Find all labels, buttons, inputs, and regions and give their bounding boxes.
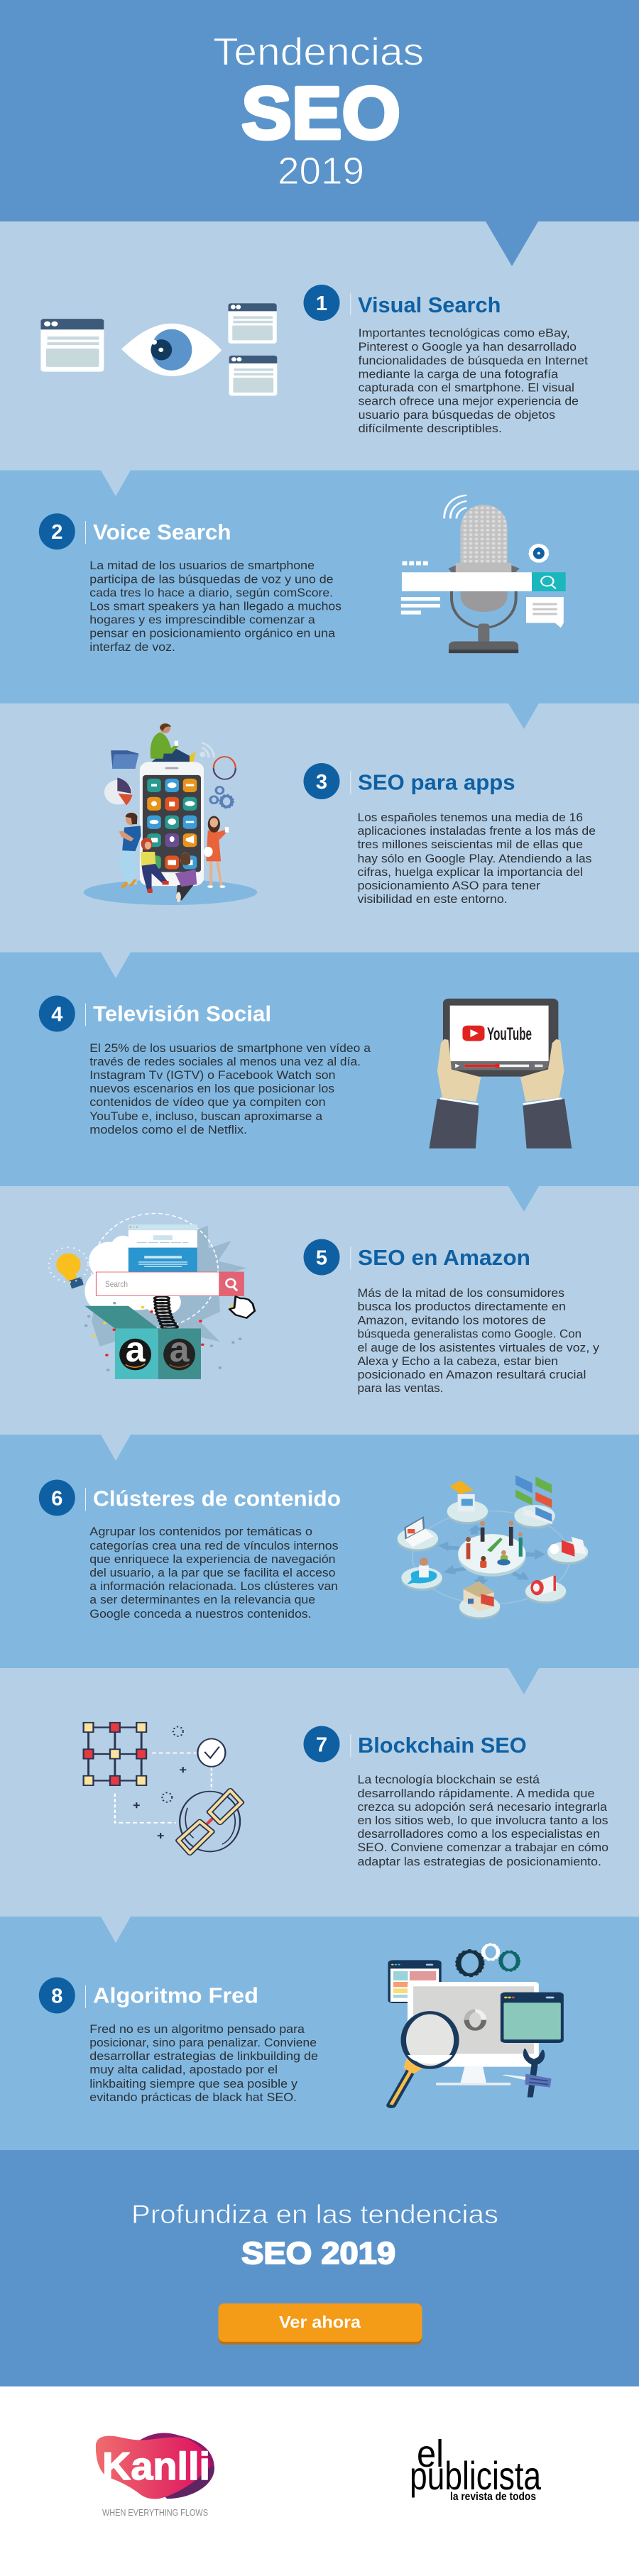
text block: SEO para apps: cifras, huelga explicar la importancia del — [358, 865, 583, 879]
text block: Clústeres de contenido: Google conceda a nuestros contenidos. — [89, 1607, 312, 1621]
illustration: hands holding tablet with YouTube — [429, 999, 572, 1149]
starburst — [92, 1225, 246, 1347]
text block: Voice Search: pensar en posicionamiento orgánico en una — [89, 626, 336, 640]
tagline: la revista de todos: la revista de todos — [450, 2491, 536, 2503]
search bar — [96, 1272, 244, 1296]
arrow: section 4 pointer — [508, 1186, 539, 1212]
text block: Televisión Social: El 25% de los usuarios de smartphone ven vídeo a — [89, 1041, 371, 1055]
heading: Visual Search: Visual Search — [358, 292, 501, 317]
text block: SEO en Amazon: busca los productos directamente en — [358, 1300, 566, 1313]
globe and chain — [178, 1790, 241, 1853]
letter a left: a — [126, 1330, 146, 1369]
icon: microphone with search bar — [401, 495, 566, 653]
envelope icon — [550, 1537, 586, 1557]
text block: Visual Search: capturada con el smartphone. El visual — [359, 380, 574, 395]
text block: Clústeres de contenido — [89, 1525, 339, 1621]
central platform — [458, 1534, 525, 1577]
text block: Clústeres de contenido: del usuario, a la par que se facilita el acceso — [89, 1566, 336, 1579]
ground ellipse — [84, 879, 257, 905]
text block: Voice Search: cada tres lo hace a diario, según comScore. — [89, 586, 333, 599]
icon: eye — [121, 324, 222, 376]
plus signs and dotted circles — [133, 1727, 186, 1838]
gears — [457, 1944, 520, 1976]
section 1: Visual Search — [40, 285, 588, 435]
browser window top right — [228, 303, 277, 344]
text block: Algoritmo Fred: evitando prácticas de black hat SEO. — [89, 2090, 297, 2104]
sleeves — [429, 1098, 572, 1149]
text block: Blockchain SEO — [358, 1773, 608, 1868]
hands — [437, 1039, 564, 1102]
number badge 3 — [304, 763, 339, 799]
text block: Blockchain SEO: desarrollando rápidamente. A medida que — [358, 1787, 595, 1800]
text block: Voice Search: hogares y es imprescindible comenzar a — [89, 613, 315, 626]
spring — [155, 1296, 178, 1329]
letter a right: a — [170, 1330, 190, 1369]
person standing, orange dress — [204, 816, 229, 888]
panel: header background — [0, 0, 639, 221]
text block: Blockchain SEO: en los sitios web, lo que involucra tanto a los — [358, 1814, 608, 1827]
YouTube wordmark: YouTube — [487, 1024, 532, 1044]
YouTube play button — [462, 1026, 484, 1041]
screwdriver — [502, 2074, 552, 2088]
number badge 4: 4 — [51, 1004, 62, 1026]
text block: Blockchain SEO: SEO. Conviene comenzar a trabajar en cómo — [358, 1841, 608, 1854]
title — [213, 30, 424, 192]
text block: Blockchain SEO: crezca su adopción será necesario integrarla — [358, 1800, 608, 1814]
text: SEO 2019: SEO 2019 — [241, 2236, 395, 2271]
arrow: header pointer — [486, 221, 538, 266]
text block: Algoritmo Fred: Fred no es un algoritmo pensado para — [89, 2022, 305, 2036]
text block: Televisión Social: contenidos de vídeo que ya compiten con — [89, 1095, 326, 1109]
text block: SEO para apps — [358, 811, 596, 906]
section 8: Algoritmo Fred — [39, 1944, 564, 2105]
person on top, green hoodie — [151, 723, 196, 762]
text block: Visual Search — [359, 327, 588, 435]
gears icon — [210, 786, 234, 808]
microphone — [448, 505, 520, 653]
illustration: blockchain grid and chain — [84, 1723, 241, 1853]
number badge 7: 7 — [316, 1733, 327, 1756]
illustration: Amazon box with search bar — [49, 1213, 255, 1379]
illustration: content cluster network — [398, 1475, 588, 1620]
panel: section 3 background — [0, 703, 639, 953]
Kanlli wordmark: Kanlli — [102, 2444, 210, 2488]
text block: SEO en Amazon: Alexa y Echo a la cabeza, estar bien — [358, 1354, 558, 1368]
open box — [84, 1306, 201, 1379]
text block: SEO para apps: tres millones seiscientas mil de ellas que — [358, 838, 583, 851]
text block: SEO para apps: Los españoles tenemos una media de 16 — [358, 811, 583, 824]
loading spinner — [466, 2011, 484, 2029]
arrow: section 7 pointer — [101, 1917, 131, 1943]
monitor — [408, 1982, 539, 2086]
number badge 1 — [304, 285, 339, 321]
section 7: Blockchain SEO — [84, 1723, 608, 1868]
text block: Visual Search: search ofrece una mejor experiencia de — [359, 395, 579, 407]
text block: Clústeres de contenido: Agrupar los contenidos por temáticas o — [89, 1525, 312, 1538]
text block: Televisión Social — [89, 1041, 371, 1136]
logo blob — [96, 2433, 214, 2499]
browser page — [129, 1224, 197, 1272]
panel: section 7 background — [0, 1668, 639, 1917]
text block: Voice Search: interfaz de voz. — [89, 640, 175, 654]
number badge 7 — [304, 1726, 339, 1762]
text block: Voice Search: La mitad de los usuarios de smartphone — [89, 559, 315, 572]
text block: SEO en Amazon: Amazon, evitando los motores de — [358, 1313, 546, 1327]
arrow: section 5 pointer — [101, 1435, 131, 1461]
number badge 5: 5 — [316, 1246, 327, 1269]
text: Profundiza en las tendencias: Profundiza en las tendencias — [131, 2200, 498, 2229]
text block: SEO en Amazon: búsqueda generalistas como Google. Con — [358, 1327, 581, 1340]
section 2: Voice Search — [39, 495, 566, 654]
text block: Televisión Social: modelos como el de Netflix. — [89, 1123, 247, 1136]
text block: SEO para apps: aplicaciones instaladas frente a los más de — [358, 824, 596, 838]
text block: SEO en Amazon — [358, 1286, 600, 1395]
text block: Televisión Social: YouTube e, incluso, buscan aproximarse a — [89, 1109, 323, 1123]
text block: Voice Search — [89, 559, 342, 654]
back browser window — [388, 1960, 442, 2003]
wifi arcs icon — [200, 742, 214, 757]
text block: Clústeres de contenido: a ser determinantes en la relevancia que — [89, 1593, 315, 1606]
text block: Blockchain SEO: desarrolladores como a los especialistas en — [358, 1827, 600, 1841]
text block: SEO para apps: hay sólo en Google Play. Atendiendo a las — [358, 852, 592, 865]
number badge 2 — [39, 513, 75, 549]
text block: Visual Search: mediante la carga de una fotografía — [359, 368, 559, 380]
megaphone icon — [530, 1575, 556, 1596]
panel: section 2 background — [0, 470, 639, 704]
section 3: SEO para apps — [84, 723, 596, 906]
dots and lines — [401, 561, 440, 615]
illustration: people around smartphone — [84, 723, 257, 905]
text block: SEO en Amazon: para las ventas. — [358, 1381, 443, 1395]
front browser window — [501, 1993, 564, 2043]
check circle — [197, 1739, 225, 1767]
heading: SEO para apps: SEO para apps — [358, 769, 515, 795]
browser window left — [40, 319, 104, 372]
text block: Visual Search: difícilmente descriptibles. — [359, 422, 502, 435]
people on central platform — [466, 1520, 523, 1568]
text block: Algoritmo Fred: desarrollar estrategias de linkbuilding de — [89, 2049, 318, 2063]
browser window bottom right — [229, 356, 277, 396]
gear — [530, 544, 547, 562]
text block: Clústeres de contenido: categorías crea una red de vínculos internos — [89, 1539, 339, 1552]
person sitting, purple shirt — [175, 853, 197, 902]
panel: closing call to action background — [0, 2150, 639, 2386]
dashed circle — [92, 1213, 218, 1327]
text block: Clústeres de contenido: a información relacionada. Los clústeres van — [89, 1579, 338, 1593]
circular arrows icon — [214, 757, 236, 779]
text block: SEO para apps: posicionamiento ASO para tener — [358, 879, 540, 892]
magnifying glass — [391, 2012, 457, 2105]
dashed connectors — [115, 1753, 212, 1823]
panel: section 5 background — [0, 1186, 639, 1435]
number badge 6 — [39, 1479, 75, 1516]
icon: eye with browser windows — [40, 303, 277, 396]
search placeholder: Search — [105, 1279, 128, 1289]
section 5: SEO en Amazon — [49, 1213, 600, 1395]
orbit ring — [413, 1511, 569, 1604]
smartphone with apps — [140, 762, 204, 886]
section 6: Clústeres de contenido — [39, 1475, 588, 1621]
node grid — [84, 1723, 146, 1785]
illustration: monitor, magnifier and tools — [388, 1944, 564, 2105]
chat bubble — [526, 597, 564, 627]
panel: section 1 background — [0, 221, 639, 470]
panel: section 4 background — [0, 953, 639, 1186]
text block: SEO para apps: visibilidad en este entorno. — [358, 892, 508, 906]
text block: Televisión Social: Instagram Tv (IGTV) o Facebook Watch son — [89, 1068, 336, 1082]
text block: Algoritmo Fred: muy alta calidad, apostado por el — [89, 2063, 278, 2076]
number badge 8 — [39, 1978, 75, 2013]
text block: Blockchain SEO: adaptar las estrategias de posicionamiento. — [358, 1855, 601, 1868]
text block: Televisión Social: nuevos escenarios en los que posicionar los — [89, 1082, 334, 1095]
text block: Visual Search: Importantes tecnológicas como eBay, — [359, 327, 570, 339]
heading: Algoritmo Fred: Algoritmo Fred — [93, 1983, 258, 2008]
market stall icon — [449, 1481, 475, 1511]
number badge 1: 1 — [316, 292, 327, 315]
text block: Algoritmo Fred: posicionar, sino para penalizar. Conviene — [89, 2036, 317, 2049]
arrow: section 3 pointer — [101, 953, 131, 978]
text block: Voice Search: Los smart speakers ya han llegado a muchos — [89, 599, 342, 613]
closing call to action — [131, 2200, 498, 2345]
hand cursor — [229, 1296, 255, 1318]
text block: SEO en Amazon: Más de la mitad de los consumidores — [358, 1286, 564, 1300]
wifi arcs — [444, 495, 466, 518]
text block: Televisión Social: través de redes sociales al menos una vez al día. — [89, 1055, 361, 1068]
text block: Algoritmo Fred — [89, 2022, 318, 2104]
search bar — [402, 572, 566, 591]
logo: Kanlli — [96, 2433, 214, 2518]
number badge 4 — [39, 995, 75, 1032]
text block: Visual Search: Pinterest o Google ya han desarrollado — [359, 340, 577, 353]
wordmark: publicista: publicista — [410, 2453, 542, 2498]
arrow: section 2 pointer — [508, 703, 539, 729]
arrows — [438, 1525, 545, 1586]
text block: Clústeres de contenido: que enriquece la experiencia de navegación — [89, 1552, 336, 1566]
button: Ver ahora — [219, 2303, 422, 2345]
heading: Televisión Social: Televisión Social — [93, 1001, 271, 1026]
folder icon — [111, 750, 138, 769]
section 4: Televisión Social — [39, 995, 572, 1149]
text block: Visual Search: funcionalidades de búsqueda en Internet — [359, 353, 588, 367]
arrow: section 1 pointer — [101, 470, 131, 496]
heading: Voice Search: Voice Search — [93, 520, 231, 544]
heading: SEO en Amazon: SEO en Amazon — [358, 1245, 530, 1270]
number badge 8: 8 — [51, 1985, 62, 2007]
number badge 6: 6 — [51, 1488, 62, 1511]
wordmark: el: el — [417, 2433, 444, 2475]
number badge 3: 3 — [316, 771, 327, 794]
light bulb — [49, 1247, 88, 1289]
text block: Visual Search: usuario para búsquedas de objetos — [359, 408, 555, 422]
tablet — [443, 999, 558, 1077]
person sitting, yellow top — [141, 838, 169, 893]
title line: 2019: 2019 — [278, 150, 364, 192]
panel: section 6 background — [0, 1435, 639, 1668]
arrow: section 6 pointer — [508, 1668, 539, 1694]
panel: section 8 background — [0, 1917, 639, 2150]
satellite platforms — [398, 1501, 588, 1620]
number badge 2: 2 — [51, 521, 62, 544]
confetti — [84, 1302, 241, 1371]
title line: Tendencias: Tendencias — [213, 30, 424, 74]
button: Ver ahora: Ver ahora — [279, 2313, 361, 2333]
customer support icon — [407, 1557, 437, 1584]
shop icon — [464, 1582, 494, 1611]
title line: SEO: SEO — [241, 72, 400, 155]
text block: Voice Search: participa de las búsquedas de voz y uno de — [89, 572, 334, 586]
text block: Blockchain SEO: La tecnología blockchain se está — [358, 1773, 540, 1786]
monitor and chat icons — [515, 1475, 552, 1524]
cloud — [84, 1236, 181, 1315]
text block: Algoritmo Fred: linkbaiting siempre que sea posible y — [89, 2077, 298, 2090]
laptop icon — [404, 1516, 434, 1547]
pie chart icon — [104, 778, 133, 805]
number badge 5 — [304, 1239, 339, 1275]
heading: Clústeres de contenido: Clústeres de contenido — [93, 1486, 341, 1511]
person standing, blue shirt — [118, 813, 141, 887]
wrench — [524, 2049, 544, 2097]
heading: Blockchain SEO: Blockchain SEO — [358, 1733, 527, 1758]
tagline: WHEN EVERYTHING FLOWS — [102, 2507, 208, 2518]
text block: SEO en Amazon: el auge de los asistentes virtuales de voz, y — [358, 1341, 600, 1354]
text block: SEO en Amazon: posicionado en Amazon resultará crucial — [358, 1368, 586, 1381]
logo: el publicista — [410, 2433, 542, 2503]
